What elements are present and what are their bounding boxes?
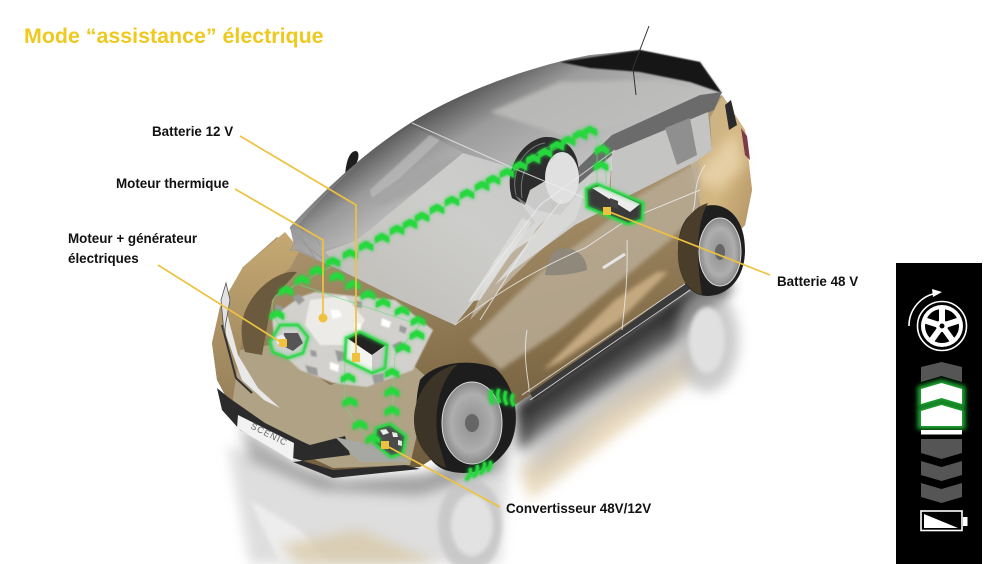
lower bumper black trim <box>217 388 420 478</box>
front wheel <box>414 363 516 473</box>
line: moteur + générateur <box>158 265 282 343</box>
roof rail <box>560 92 722 195</box>
side windows <box>610 112 712 205</box>
engine bay <box>272 292 433 387</box>
rear tail window <box>725 100 737 130</box>
panel: status indicator <box>896 263 982 564</box>
chrome grille strip <box>224 300 280 408</box>
roof panels <box>490 80 700 138</box>
line: Batterie 48 V <box>607 211 770 275</box>
left door mirror <box>345 151 358 176</box>
license plate <box>237 415 294 461</box>
line: convertisseur <box>385 445 500 507</box>
see-through rear wheel <box>470 137 590 320</box>
black roof <box>560 50 722 93</box>
license plate: SCENIC <box>249 421 289 448</box>
icon: battery <box>921 511 968 530</box>
green energy flow <box>270 126 643 480</box>
car body shell <box>212 95 752 473</box>
line: Batterie 12 V <box>240 136 356 356</box>
door handle <box>603 254 625 268</box>
label: Moteur + générateur électriques: électriques <box>68 251 139 266</box>
title: Mode “assistance” électrique <box>24 24 324 48</box>
arrows <box>270 126 609 444</box>
converter <box>374 424 406 456</box>
rear quarter <box>690 96 752 270</box>
car <box>212 26 752 478</box>
roof and windscreen glass <box>290 50 722 325</box>
gauge: downward chevrons <box>921 439 962 503</box>
rear wheel <box>678 203 745 296</box>
sill <box>530 280 694 401</box>
headlamp mesh <box>290 228 322 258</box>
label: Moteur thermique: Moteur thermique <box>116 176 229 191</box>
component outlines <box>270 184 643 457</box>
gauge: upward chevrons <box>921 362 962 426</box>
ground shadow under sill <box>515 285 735 450</box>
gauge: centre bar <box>921 430 962 434</box>
label: Moteur + générateur électriques <box>68 231 198 266</box>
rear door upper <box>470 160 700 370</box>
A pillar <box>468 218 532 302</box>
wheel torque waves <box>466 389 514 480</box>
fog lamp <box>335 437 410 462</box>
line: Moteur thermique <box>235 189 323 318</box>
floor reflection <box>228 285 739 564</box>
body lines <box>412 60 722 392</box>
48 V battery <box>586 184 643 224</box>
front wheel well <box>242 272 297 355</box>
windscreen side panel <box>297 125 463 250</box>
motor generator <box>270 325 308 358</box>
leader lines <box>158 136 770 507</box>
ground shadow under bumper <box>240 425 510 495</box>
lower front bumper <box>232 345 430 468</box>
headlamp <box>221 283 230 333</box>
label: Batterie 12 V: Batterie 12 V <box>152 124 233 139</box>
label: Moteur + générateur électriques: Moteur + générateur <box>68 231 198 246</box>
label: Batterie 48 V: Batterie 48 V <box>777 274 858 289</box>
label: Convertisseur 48V/12V: Convertisseur 48V/12V <box>506 501 651 516</box>
icon: rotating wheel <box>909 289 966 350</box>
door light streak <box>543 272 668 370</box>
rear tail light <box>741 128 750 160</box>
antenna <box>633 26 649 95</box>
leader endpoints <box>279 207 611 449</box>
flow guide lines <box>272 128 606 445</box>
front fender <box>212 232 300 405</box>
right door mirror <box>545 248 587 275</box>
12 V battery <box>345 332 387 373</box>
hood <box>325 153 560 325</box>
